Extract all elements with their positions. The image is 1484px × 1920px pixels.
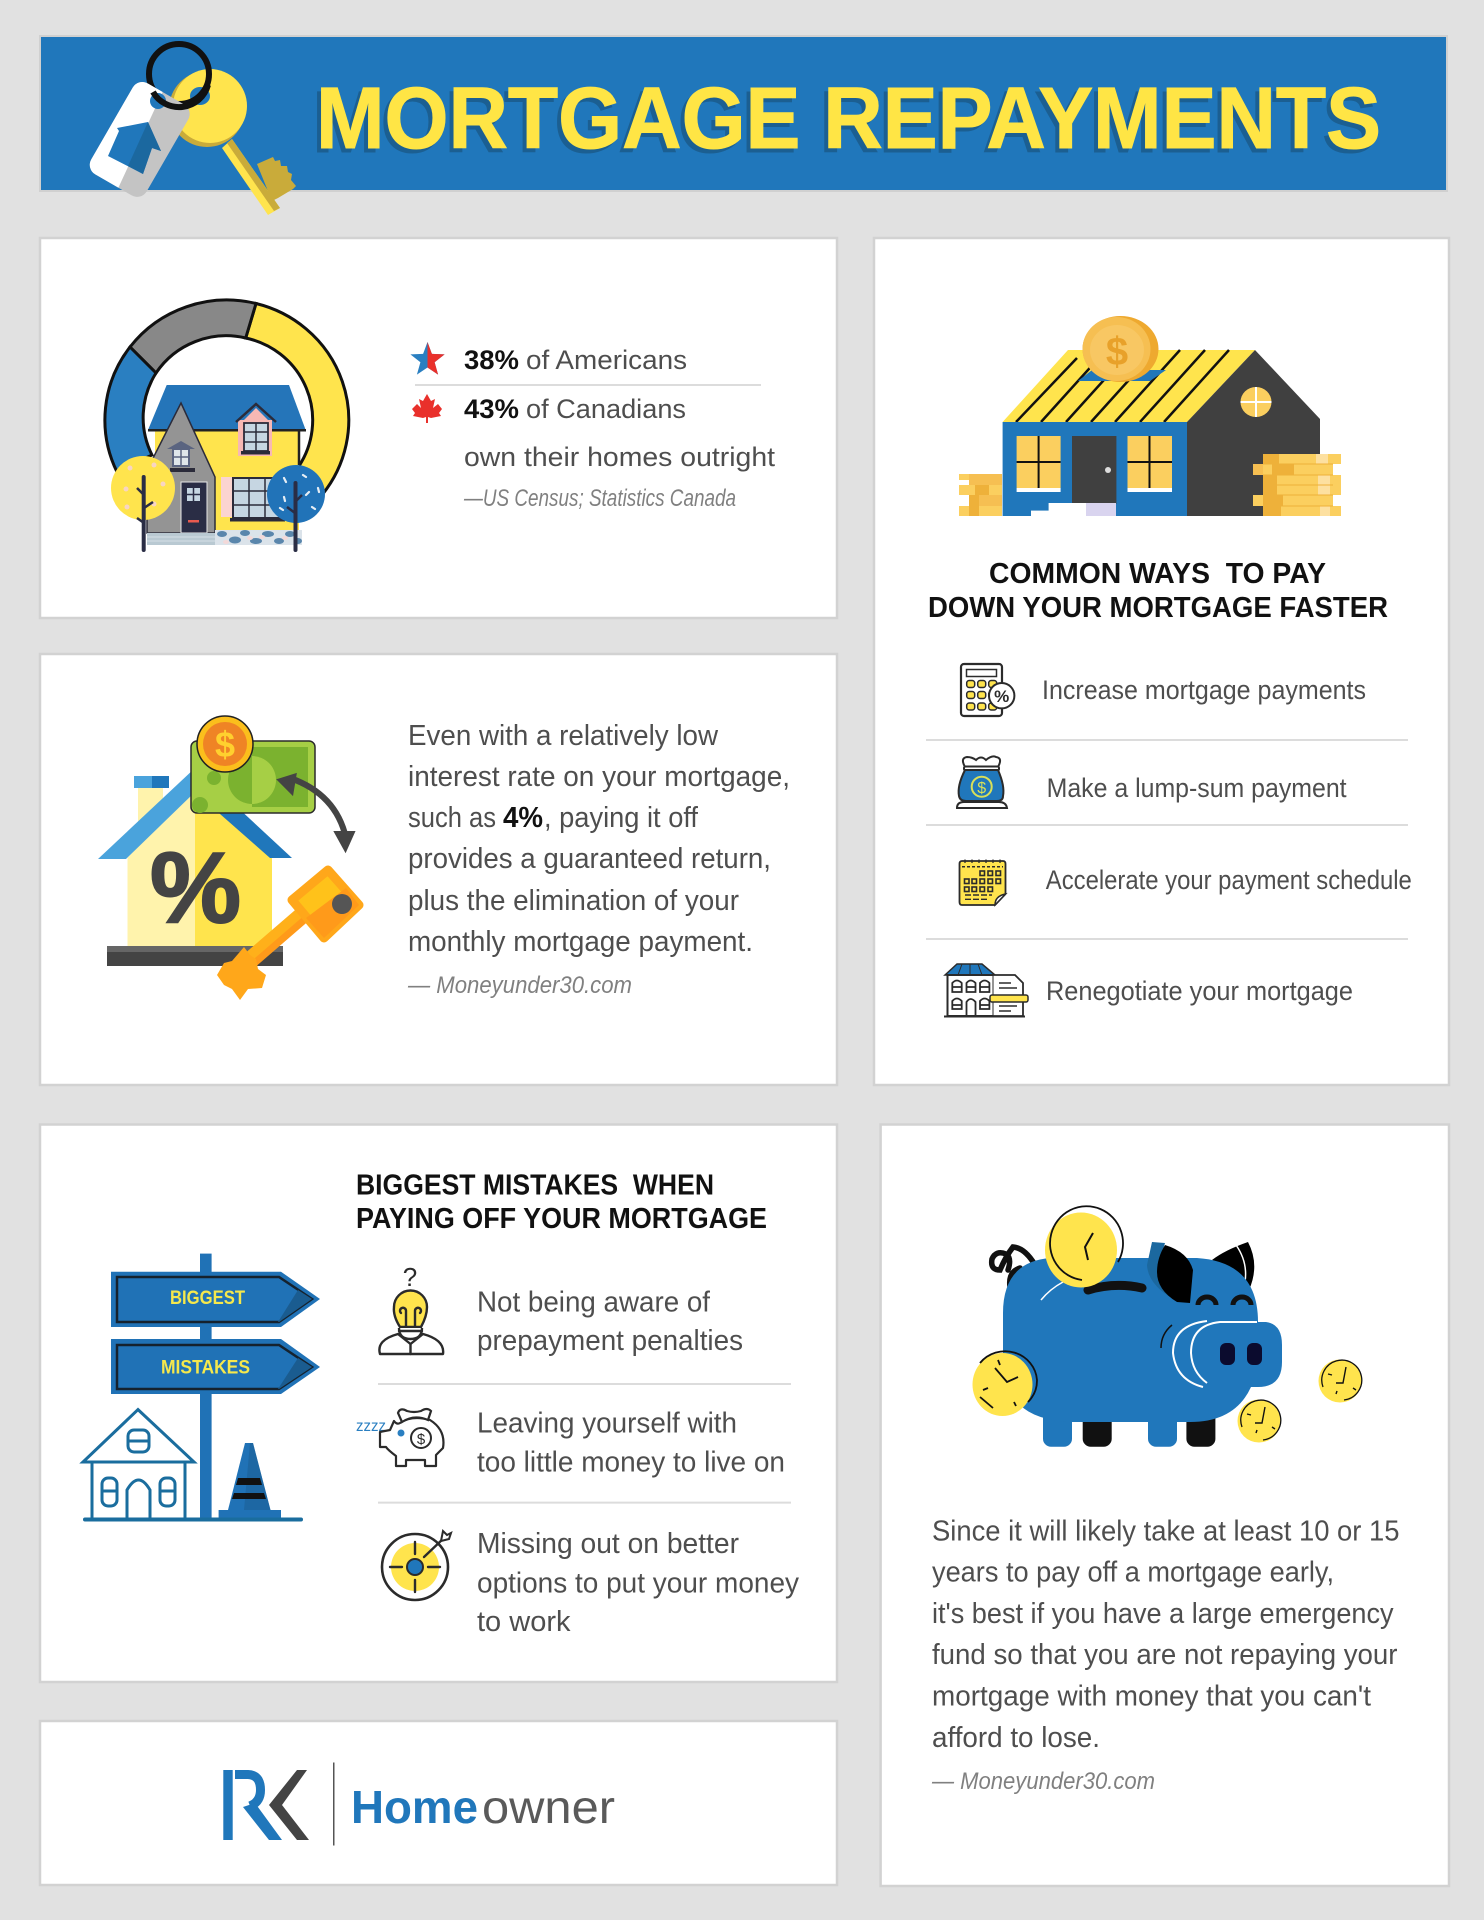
stat: Canadians: of Canadians — [526, 394, 686, 424]
icon: calculator — [961, 664, 1014, 716]
icon: money bag: $ — [977, 780, 986, 797]
source: — Moneyunder30.com — [407, 972, 632, 999]
body text: provides a guaranteed return, — [408, 843, 771, 875]
label: prepayment penalties — [477, 1325, 743, 1357]
illustration: signpost, house and cone: MISTAKES — [161, 1358, 250, 1378]
illustration: signpost, house and cone: BIGGEST — [170, 1288, 245, 1309]
body text: such as — [408, 802, 496, 834]
icon: calendar — [960, 860, 1006, 905]
heading: BIGGEST MISTAKES WHEN — [356, 1170, 714, 1202]
icon: house with coin: $ — [1106, 330, 1128, 374]
icon: house with percent, money and key — [98, 716, 359, 1000]
body text: interest rate on your mortgage, — [408, 761, 790, 793]
wordmark: Home — [351, 1781, 478, 1833]
icon: building and contract — [944, 964, 1028, 1016]
item: lump sum — [957, 756, 1347, 808]
body text: afford to lose. — [932, 1722, 1100, 1754]
wordmark: owner — [482, 1781, 615, 1833]
coin stack: left — [959, 474, 1002, 516]
icon: lightbulb person — [379, 1262, 443, 1354]
heading: DOWN YOUR MORTGAGE FASTER — [928, 592, 1388, 624]
panel: logo — [40, 1721, 837, 1885]
label: Renegotiate your mortgage — [1046, 976, 1353, 1006]
body text: Since it will likely take at least 10 or 15 — [932, 1515, 1400, 1547]
body text — [408, 720, 790, 958]
label — [477, 1407, 785, 1479]
item: better options — [382, 1528, 799, 1638]
icon: sleeping piggy bank: $ — [417, 1431, 426, 1448]
stat: Americans — [464, 345, 687, 375]
item: accelerate schedule — [960, 860, 1412, 905]
body text: mortgage with money that you can't — [932, 1681, 1371, 1713]
icon: house in donut ring — [105, 300, 349, 550]
icon: house with percent, money and key: % — [150, 832, 241, 944]
body text: fund so that you are not repaying your — [932, 1639, 1398, 1671]
wordmark — [351, 1781, 615, 1833]
panel: emergency fund — [881, 1124, 1449, 1886]
item: increase payments — [961, 664, 1366, 716]
body text: monthly mortgage payment. — [408, 926, 753, 958]
title: MORTGAGE REPAYMENTS — [316, 70, 1381, 167]
label: Make a lump-sum payment — [1047, 773, 1347, 803]
label: to work — [477, 1606, 571, 1638]
body text: , paying it off — [544, 802, 699, 834]
label: Increase mortgage payments — [1042, 675, 1366, 705]
item: prepayment penalties — [379, 1262, 743, 1357]
icon: house with percent, money and key: $ — [215, 724, 235, 765]
icon: sleeping piggy bank — [356, 1409, 443, 1466]
panel: guaranteed return — [40, 654, 837, 1085]
body text — [932, 1515, 1400, 1754]
body text: Even with a relatively low — [408, 720, 719, 752]
icon: sleeping piggy bank: zzzz — [356, 1418, 386, 1435]
body text: it's best if you have a large emergency — [932, 1598, 1394, 1630]
label: Not being aware of — [477, 1286, 711, 1318]
logo mark — [223, 1770, 309, 1840]
coin stack: right — [1253, 454, 1341, 516]
label — [477, 1528, 799, 1638]
label: options to put your money — [477, 1568, 799, 1600]
label: Missing out on better — [477, 1528, 739, 1560]
stat: Americans: of Americans — [526, 345, 687, 375]
icon: Canadian maple leaf — [412, 394, 442, 423]
icon: house with coin — [959, 316, 1341, 516]
icon: calculator: % — [994, 687, 1009, 706]
panel: homeownership statistics — [40, 238, 837, 618]
body text: plus the elimination of your — [408, 885, 739, 917]
icon: lightbulb person: ? — [403, 1262, 417, 1292]
banner — [40, 36, 1447, 215]
label: Accelerate your payment schedule — [1046, 865, 1412, 895]
item: too little money — [356, 1407, 785, 1479]
body text: years to pay off a mortgage early, — [932, 1557, 1334, 1589]
icon: house keys — [86, 44, 296, 215]
heading — [928, 558, 1388, 624]
stat: Americans: 38% — [464, 345, 519, 375]
heading: PAYING OFF YOUR MORTGAGE — [356, 1203, 767, 1235]
icon: money bag — [957, 756, 1007, 808]
stat caption: own their homes outright — [464, 442, 776, 472]
body text: 4% — [503, 802, 543, 834]
panel: biggest mistakes — [40, 1124, 837, 1682]
icon: US star — [410, 342, 445, 375]
item: renegotiate — [944, 964, 1353, 1016]
illustration: blue piggy bank with coins — [972, 1206, 1362, 1447]
logo: RK Homeowner — [223, 1762, 615, 1846]
illustration: signpost, house and cone — [83, 1254, 320, 1522]
heading — [356, 1170, 767, 1235]
panel: common ways to pay down faster — [874, 238, 1449, 1085]
stat: Canadians: 43% — [464, 394, 519, 424]
label: Leaving yourself with — [477, 1407, 737, 1439]
label: too little money to live on — [477, 1447, 785, 1479]
source: —US Census; Statistics Canada — [463, 485, 736, 512]
icon: target and arrow — [382, 1531, 451, 1600]
heading: COMMON WAYS TO PAY — [989, 558, 1326, 590]
source: — Moneyunder30.com — [931, 1768, 1155, 1795]
label — [477, 1286, 743, 1357]
